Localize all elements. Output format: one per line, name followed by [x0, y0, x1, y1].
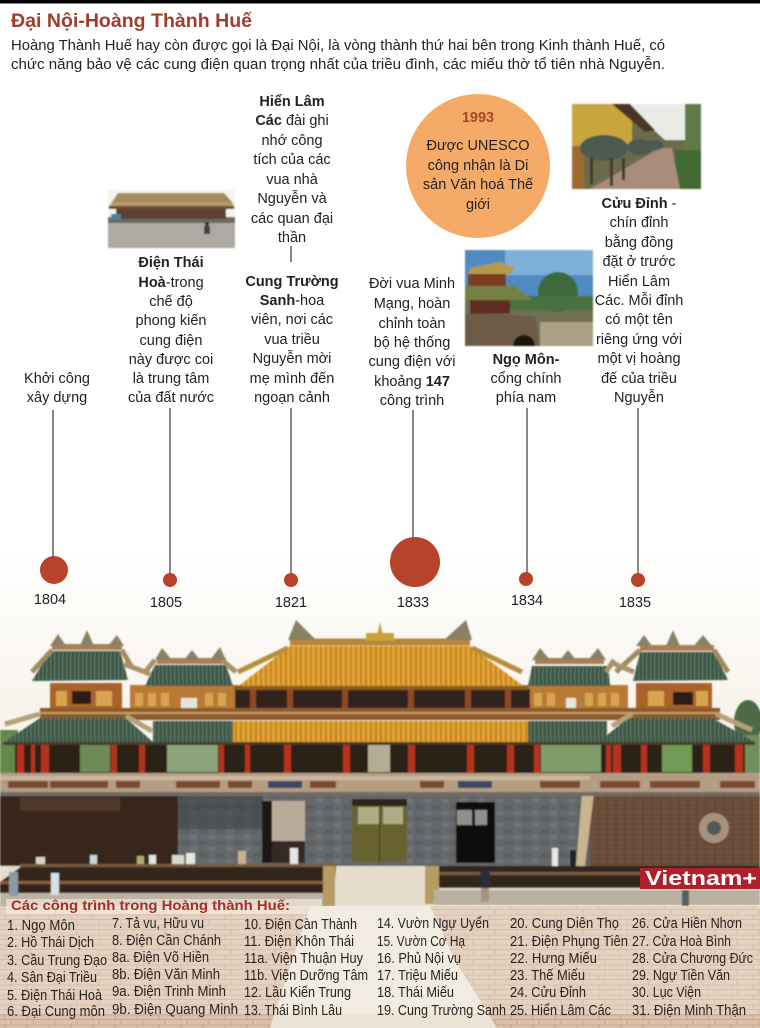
timeline entry: Minh Mạng completes the system: Đời vua Minh [369, 276, 455, 292]
timeline entry: Cung Trường Sanh: viên, nơi các [251, 312, 333, 328]
timeline entry: Ngọ Môn: Ngọ Môn- [493, 352, 560, 368]
list: buildings 10–13: 12. Lầu Kiến Trung [244, 985, 351, 1001]
timeline entry: Hiển Lâm Các: thần [278, 230, 306, 246]
timeline entry: Hiển Lâm Các: Hiển Lâm [259, 94, 325, 110]
central gate [352, 799, 407, 862]
timeline entry: Cửu Đỉnh: bằng đồng [605, 234, 673, 251]
photo: Điện Thái Hoà [108, 190, 235, 248]
timeline entry: Cung Trường Sanh: vua triều [264, 332, 320, 348]
timeline entry: Cửu Đỉnh [595, 196, 683, 406]
timeline entry: Cửu Đỉnh: Cửu Đỉnh - [602, 196, 677, 212]
timeline entry: Điện Thái Hoà: Hoà-trong [138, 275, 204, 291]
list: buildings 1–6: 5. Điện Thái Hoà [7, 988, 103, 1004]
timeline entry: 1804 start of construction [24, 371, 90, 406]
list: buildings 20–25: 21. Điện Phụng Tiên [510, 934, 628, 950]
upper roofs [32, 620, 728, 690]
top black rule [0, 0, 760, 4]
people on foreground [9, 870, 689, 906]
upper walls [40, 683, 720, 720]
lower roofs [3, 714, 755, 745]
timeline entry: Cửu Đỉnh: Nguyễn [614, 389, 664, 406]
timeline entry: Minh Mạng completes the system: Mạng, hoàn [374, 296, 450, 312]
visitors [36, 848, 576, 866]
intro text [11, 37, 665, 73]
list: buildings 14–19: 16. Phủ Nội vụ [377, 951, 461, 967]
timeline entry: Ngọ Môn: cổng chính [491, 371, 561, 387]
timeline entry: Hiển Lâm Các: Nguyễn và [257, 190, 328, 207]
list: buildings 26–31: 26. Cửa Hiền Nhơn [632, 916, 742, 932]
list: buildings 14–19: 17. Triệu Miếu [377, 968, 458, 984]
timeline entry: Điện Thái Hoà: của đất nước [128, 390, 214, 406]
left gate [262, 801, 272, 863]
list: buildings 1–6: 2. Hồ Thái Dịch [7, 935, 94, 951]
list: buildings 7–9b [112, 916, 238, 1018]
list: buildings 14–19 [377, 916, 506, 1019]
timeline entry: Hiển Lâm Các: các quan đại [251, 211, 333, 227]
column level [15, 743, 745, 774]
list: buildings 1–6: 4. Sân Đại Triều [7, 970, 97, 986]
timeline: year labels: 1834 [511, 593, 543, 609]
list: buildings 14–19: 18. Thái Miếu [377, 985, 454, 1001]
intro text: chức năng bảo vệ các cung điện quan trọng nhất của triều đình, các miếu thờ tổ tiên nhà Nguyễn. [11, 56, 665, 73]
list: buildings 7–9b: 8a. Điện Võ Hiền [112, 950, 209, 966]
right balustrade [425, 866, 760, 905]
title: Đại Nội-Hoàng Thành Huế [11, 10, 252, 32]
list: buildings 26–31 [632, 916, 753, 1019]
list: buildings 10–13: 11a. Viện Thuận Huy [244, 951, 364, 967]
timeline entry: Cung Trường Sanh [245, 274, 339, 406]
list: buildings 1–6: 1. Ngọ Môn [7, 918, 75, 934]
list: buildings 10–13: 11b. Viện Dưỡng Tâm [244, 968, 368, 984]
timeline entry: Điện Thái Hoà: này được coi [129, 352, 213, 368]
timeline entry: Minh Mạng completes the system [369, 276, 455, 409]
photo: Ngọ Môn gate [465, 250, 593, 346]
logo: Vietnam+: Vietnam+ [645, 868, 757, 890]
timeline entry: Cung Trường Sanh: Cung Trường [245, 274, 339, 290]
timeline entry: Minh Mạng completes the system: công trình [380, 393, 444, 409]
timeline entry: Cửu Đỉnh: đặt ở trước [602, 254, 676, 270]
list: buildings 26–31: 29. Ngự Tiền Văn [632, 968, 730, 984]
photo: Cửu Đỉnh bronze urns [572, 104, 701, 189]
terrace balustrade [0, 773, 760, 793]
callout: 1993 UNESCO recognition: giới [466, 197, 490, 213]
callout: 1993 UNESCO recognition: sản Văn hoá Thế [423, 177, 533, 193]
timeline entry: Hiển Lâm Các: Các đài ghi [255, 113, 329, 129]
list: buildings 1–6 [7, 918, 107, 1020]
list heading: Các công trình trong Hoàng thành Huế: [11, 897, 290, 913]
list: buildings 10–13: 11. Điện Khôn Thái [244, 934, 354, 950]
list: buildings 7–9b: 9b. Điện Quang Minh [112, 1002, 238, 1018]
roof-ridge ornaments [50, 620, 712, 660]
list: buildings 10–13: 10. Điện Càn Thành [244, 917, 357, 933]
list: buildings 20–25: 22. Hưng Miếu [510, 951, 597, 967]
intro text: Hoàng Thành Huế hay còn được gọi là Đại Nội, là vòng thành thứ hai bên trong Kinh thành Huế, có [11, 37, 665, 54]
callout: 1993 UNESCO recognition: Được UNESCO [426, 138, 530, 154]
list: buildings 26–31: 31. Điện Minh Thận [632, 1003, 746, 1019]
timeline entry: Cửu Đỉnh: một vị hoàng [597, 351, 681, 367]
timeline entry: Cửu Đỉnh: chín đỉnh [610, 215, 668, 231]
timeline entry: Cửu Đỉnh: riêng ứng với [596, 332, 682, 348]
timeline entry: Hiển Lâm Các [251, 94, 333, 246]
timeline: year labels [34, 592, 651, 611]
photo: Ngọ Môn palace facade [0, 620, 760, 907]
callout: 1993 UNESCO recognition [406, 94, 550, 238]
list: buildings 10–13: 13. Thái Bình Lâu [244, 1003, 342, 1019]
list: buildings 20–25: 25. Hiển Lâm Các [510, 1003, 611, 1019]
timeline entry: Cửu Đỉnh: đế của triều [601, 371, 677, 387]
timeline: year labels: 1833 [397, 595, 429, 611]
timeline entry: Điện Thái Hoà: phong kiến [136, 313, 206, 329]
timeline: year labels: 1821 [275, 595, 307, 611]
timeline entry: Cung Trường Sanh: Sanh-hoa [260, 293, 325, 309]
timeline entry: Hiển Lâm Các: vua nhà [266, 172, 319, 188]
timeline entry: 1804 start of construction: xây dựng [27, 390, 87, 406]
timeline entry: Ngọ Môn [491, 352, 561, 406]
timeline: connector lines [53, 246, 638, 576]
list: buildings 7–9b: 8. Điện Cần Chánh [112, 933, 221, 949]
timeline entry: Minh Mạng completes the system: cung điện với [369, 354, 455, 370]
timeline entry: Minh Mạng completes the system: chỉnh toàn [379, 316, 445, 332]
timeline entry: 1804 start of construction: Khởi công [24, 371, 90, 387]
timeline entry: Cung Trường Sanh: Nguyễn mời [253, 350, 331, 367]
list: buildings 14–19: 19. Cung Trường Sanh [377, 1003, 506, 1019]
right gate [456, 802, 495, 863]
callout: 1993 UNESCO recognition: công nhận là Di [428, 158, 528, 174]
timeline entry: Minh Mạng completes the system: khoảng 147 [374, 374, 450, 390]
list: buildings 1–6: 3. Cầu Trung Đạo [7, 953, 107, 969]
timeline entry: Điện Thái Hoà: cung điện [140, 333, 202, 349]
round wall medallion [699, 813, 729, 843]
list: buildings 20–25: 23. Thế Miếu [510, 968, 585, 984]
list: buildings 14–19: 14. Vườn Ngự Uyển [377, 916, 489, 932]
list: buildings 7–9b: 8b. Điện Văn Minh [112, 967, 220, 983]
timeline entry: Điện Thái Hoà: chế độ [149, 294, 193, 310]
trees at the edges [0, 700, 760, 775]
timeline: year markers [40, 537, 645, 587]
timeline entry: Cửu Đỉnh: Các. Mỗi đỉnh [595, 292, 683, 309]
callout: 1993 UNESCO recognition: 1993 [462, 110, 494, 126]
left balustrade [0, 864, 336, 907]
pavement background [0, 906, 760, 1028]
list: buildings 26–31: 27. Cửa Hoà Bình [632, 934, 731, 950]
list: buildings 10–13 [244, 917, 368, 1019]
list: buildings 26–31: 30. Lục Viện [632, 985, 701, 1001]
timeline entry: Cửu Đỉnh: có một tên [605, 312, 673, 328]
timeline entry: Hiển Lâm Các: nhớ công [261, 133, 323, 149]
timeline entry: Điện Thái Hoà: Điện Thái [138, 255, 204, 271]
fortress walls [0, 792, 760, 866]
mural in left gate [272, 801, 305, 863]
timeline entry: Cung Trường Sanh: ngoạn cảnh [254, 390, 330, 406]
list: buildings 20–25: 24. Cửu Đỉnh [510, 985, 586, 1001]
timeline entry: Hiển Lâm Các: tích của các [253, 152, 331, 168]
timeline: year labels: 1805 [150, 595, 182, 611]
timeline entry: Cung Trường Sanh: mẹ mình đến [250, 371, 334, 387]
list: buildings 20–25 [510, 916, 628, 1019]
list: buildings 20–25: 20. Cung Diên Thọ [510, 916, 619, 932]
timeline entry: Ngọ Môn: phía nam [496, 390, 556, 406]
timeline entry: Cửu Đỉnh: Hiển Lâm [608, 274, 670, 290]
timeline entry: Điện Thái Hoà [108, 190, 235, 406]
timeline: year labels: 1835 [619, 595, 651, 611]
list: buildings 1–6: 6. Đại Cung môn [7, 1004, 105, 1020]
list: buildings 7–9b: 9a. Điện Trinh Minh [112, 984, 226, 1000]
timeline entry: Điện Thái Hoà: là trung tâm [133, 371, 209, 387]
list: buildings 7–9b: 7. Tả vu, Hữu vu [112, 916, 204, 932]
background photo: sky behind palace [0, 548, 760, 798]
timeline entry: Minh Mạng completes the system: bộ hệ thống [374, 335, 450, 351]
ground and steps [0, 866, 760, 906]
list: buildings 14–19: 15. Vườn Cơ Hạ [377, 934, 466, 950]
timeline: year labels: 1804 [34, 592, 66, 608]
